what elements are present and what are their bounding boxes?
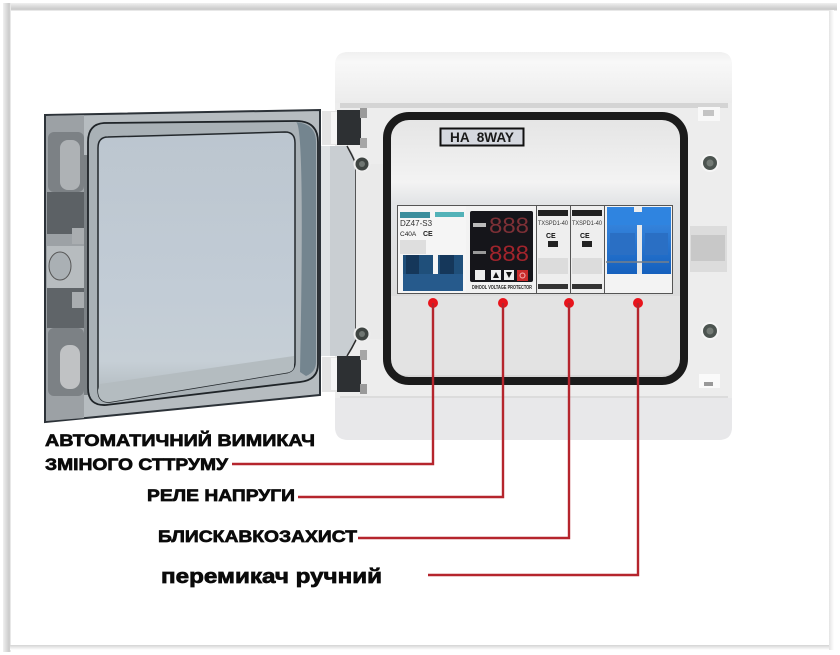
interior lower highlight [391,296,680,375]
door glass [98,132,295,402]
text: surge protection: БЛИСКАВКОЗАХИСТ [158,527,358,546]
text: circuit breaker line 1: АВТОМАТИЧНИЙ ВИМИКАЧ [45,431,315,450]
screw: top right [701,154,719,172]
leader: manual switch [428,298,643,575]
surge protector 1: CE [546,233,556,240]
leader: voltage relay [298,298,508,497]
enclosure top cap [335,52,732,103]
surge protector 2: TXSPD1-40 [572,220,602,227]
enclosure bottom cap [335,398,732,440]
leader: circuit breaker [232,298,438,464]
text: voltage relay: РЕЛЕ НАПРУГИ [147,486,295,505]
circuit breaker: CE [423,231,433,238]
rubber gasket [387,116,684,381]
screw: bottom right [701,322,719,340]
circuit breaker [398,206,466,293]
door seal [88,121,318,405]
enclosure body [335,52,732,440]
voltage relay: 888 [489,213,529,238]
voltage relay: DIHOOL VOLTAGE PROTECTOR [472,285,532,291]
device row [397,205,673,294]
voltage relay [466,206,536,293]
surge protector 2: CE [580,233,590,240]
side slot [690,226,727,272]
circuit breaker: DZ47-S3 [400,219,433,228]
door hinges [322,108,367,394]
clip: top right [698,107,720,121]
surge protector 1: TXSPD1-40 [538,220,568,227]
circuit breaker: C40A [400,231,417,238]
screw: hinge top [354,156,370,172]
leader: surge protection [358,298,574,538]
surge protector 2 [571,206,604,293]
label: HA 8WAY: HA 8WAY [450,129,515,145]
text: circuit breaker line 2: ЗМІНОГО СТТРУМУ [45,455,228,474]
door frame [45,110,320,422]
door gutter [318,146,383,356]
surge protector 1 [537,206,570,293]
interior panel [387,116,683,381]
transparent door [45,110,320,422]
text: manual switch: перемикач ручний [161,566,382,588]
enclosure box [335,52,732,440]
manual switch [605,206,672,293]
voltage relay: 888 [489,241,529,266]
clip: bottom right [699,374,720,388]
screw: hinge bottom [354,326,370,342]
door latches [47,132,92,396]
